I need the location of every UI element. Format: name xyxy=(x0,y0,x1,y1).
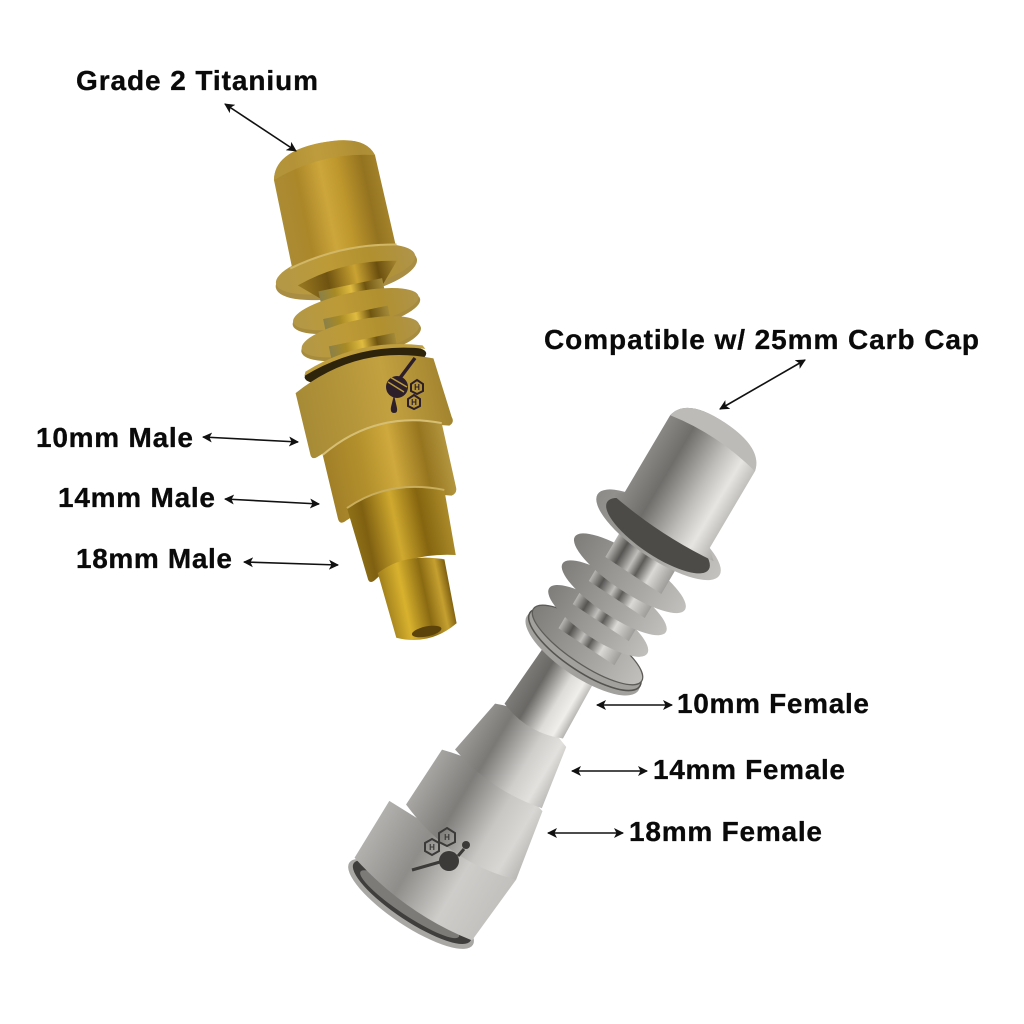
tip section: gold xyxy=(376,552,459,646)
base ring: silver xyxy=(349,797,516,950)
arrow: 10mm Female xyxy=(597,704,672,706)
cooling fin 1: silver xyxy=(565,521,695,626)
10mm section: gold xyxy=(292,344,455,459)
neck segment 1: silver xyxy=(589,556,660,618)
cap: gold xyxy=(267,132,397,269)
label: 14mm Female: 14mm Female xyxy=(653,754,845,785)
arrow: 10mm Male xyxy=(203,437,298,442)
cooling fin 2: silver xyxy=(553,548,675,647)
collar rim: gold xyxy=(301,336,429,392)
arrow: 14mm Male xyxy=(225,499,319,504)
cooling fin 2: gold xyxy=(297,308,426,376)
cap: silver xyxy=(610,389,776,565)
tip opening xyxy=(411,624,442,639)
opening: silver xyxy=(338,844,484,964)
14mm section: gold xyxy=(319,412,458,524)
arrow: carb cap xyxy=(720,360,805,409)
18mm section: gold xyxy=(345,479,460,584)
logo: honey dipper gold: H xyxy=(414,383,420,392)
neck: gold xyxy=(318,278,388,321)
neck segment 2: silver xyxy=(573,580,643,641)
arrow: Grade 2 Titanium xyxy=(225,104,296,151)
neck segment 3: silver xyxy=(558,603,629,665)
10mm section: silver xyxy=(502,643,597,746)
arrow: 14mm Female xyxy=(572,770,647,772)
arrow: 18mm Male xyxy=(244,562,338,565)
label: Compatible carb cap: Compatible w/ 25mm Carb Cap xyxy=(544,324,979,355)
label: 14mm Male: 14mm Male xyxy=(58,482,215,513)
label: 10mm Male: 10mm Male xyxy=(36,422,193,453)
14mm section: silver xyxy=(451,689,578,814)
cooling fin 1: gold xyxy=(289,279,426,353)
silver titanium nail xyxy=(338,368,786,977)
logo: honey dipper silver: H xyxy=(429,843,435,852)
logo: honey dipper gold xyxy=(386,358,423,413)
label: 18mm Female: 18mm Female xyxy=(629,816,822,847)
neck segment 0: silver xyxy=(605,519,684,594)
label: Grade 2 Titanium: Grade 2 Titanium xyxy=(76,65,318,96)
gold titanium nail xyxy=(247,128,495,655)
flange: silver xyxy=(585,474,732,596)
flange: gold xyxy=(271,234,422,313)
label: 10mm Female: 10mm Female xyxy=(677,688,869,719)
logo: honey dipper gold: H xyxy=(411,398,417,407)
label: 18mm Male: 18mm Male xyxy=(76,543,232,574)
arrow: 18mm Female xyxy=(548,832,623,834)
cooling fin 3: silver xyxy=(540,573,656,669)
threaded fin: silver xyxy=(515,591,654,711)
logo: honey dipper silver: H xyxy=(444,833,450,842)
18mm section: silver xyxy=(399,739,556,889)
logo: honey dipper silver xyxy=(412,828,470,871)
